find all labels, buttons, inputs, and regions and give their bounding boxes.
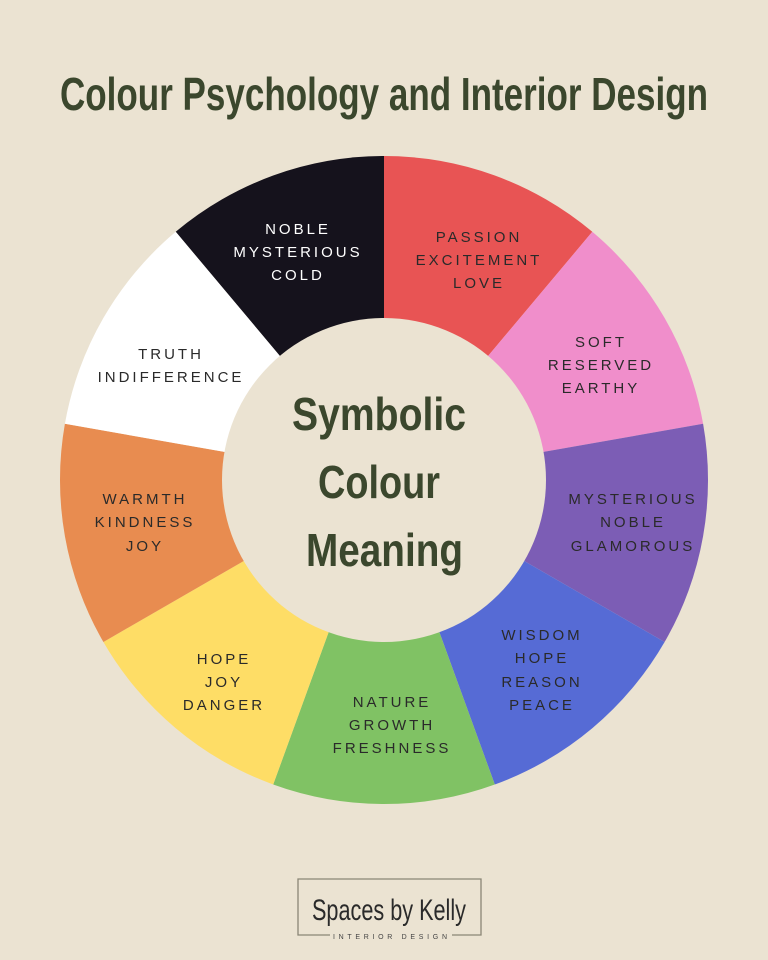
logo bbox=[298, 879, 481, 941]
label: purple: GLAMOROUS bbox=[571, 538, 695, 555]
label: orange: JOY bbox=[126, 538, 164, 555]
label: red: EXCITEMENT bbox=[416, 252, 542, 269]
label: orange bbox=[95, 491, 195, 555]
label: pink: SOFT bbox=[575, 334, 627, 351]
label: yellow: DANGER bbox=[183, 697, 265, 714]
label: red: LOVE bbox=[453, 275, 505, 292]
segment labels bbox=[95, 221, 698, 757]
label: pink: RESERVED bbox=[548, 357, 654, 374]
segment: orange bbox=[60, 424, 384, 642]
label: orange: KINDNESS bbox=[95, 514, 195, 531]
segment: black bbox=[176, 156, 384, 480]
label: pink: EARTHY bbox=[562, 380, 640, 397]
label: white: INDIFFERENCE bbox=[98, 369, 244, 386]
label: yellow: HOPE bbox=[197, 651, 251, 668]
label: purple bbox=[568, 491, 698, 555]
label: blue bbox=[501, 627, 583, 714]
label: green: NATURE bbox=[353, 694, 431, 711]
label: white: TRUTH bbox=[138, 346, 204, 363]
label: green bbox=[333, 694, 451, 757]
segment: blue bbox=[384, 480, 665, 784]
label: black: NOBLE bbox=[265, 221, 331, 238]
segment: white bbox=[65, 232, 384, 480]
segment: pink bbox=[384, 232, 703, 480]
label: blue: HOPE bbox=[515, 650, 569, 667]
logo: INTERIOR DESIGN bbox=[333, 934, 447, 941]
label: red: PASSION bbox=[436, 229, 522, 246]
label: black bbox=[233, 221, 363, 284]
label: black: MYSTERIOUS bbox=[233, 244, 363, 261]
center text bbox=[292, 388, 466, 576]
segment: purple bbox=[384, 424, 708, 642]
logo: Spaces by Kelly bbox=[312, 894, 466, 927]
label: yellow bbox=[183, 651, 265, 714]
label: white bbox=[98, 346, 244, 386]
label: orange: WARMTH bbox=[103, 491, 187, 508]
label: blue: WISDOM bbox=[501, 627, 583, 644]
center text: Symbolic bbox=[292, 388, 466, 440]
center text: Meaning bbox=[306, 524, 463, 576]
label: purple: MYSTERIOUS bbox=[568, 491, 698, 508]
center text: Colour bbox=[318, 456, 440, 508]
label: black: COLD bbox=[271, 267, 325, 284]
inner circle bbox=[222, 318, 546, 642]
label: blue: REASON bbox=[501, 674, 583, 691]
segment: yellow bbox=[103, 480, 384, 784]
segment: green bbox=[273, 480, 495, 804]
label: green: GROWTH bbox=[349, 717, 435, 734]
label: green: FRESHNESS bbox=[333, 740, 451, 757]
label: blue: PEACE bbox=[509, 697, 575, 714]
label: red bbox=[416, 229, 542, 292]
label: yellow: JOY bbox=[205, 674, 243, 691]
label: pink bbox=[548, 334, 654, 397]
segment: red bbox=[384, 156, 592, 480]
label: purple: NOBLE bbox=[600, 514, 666, 531]
